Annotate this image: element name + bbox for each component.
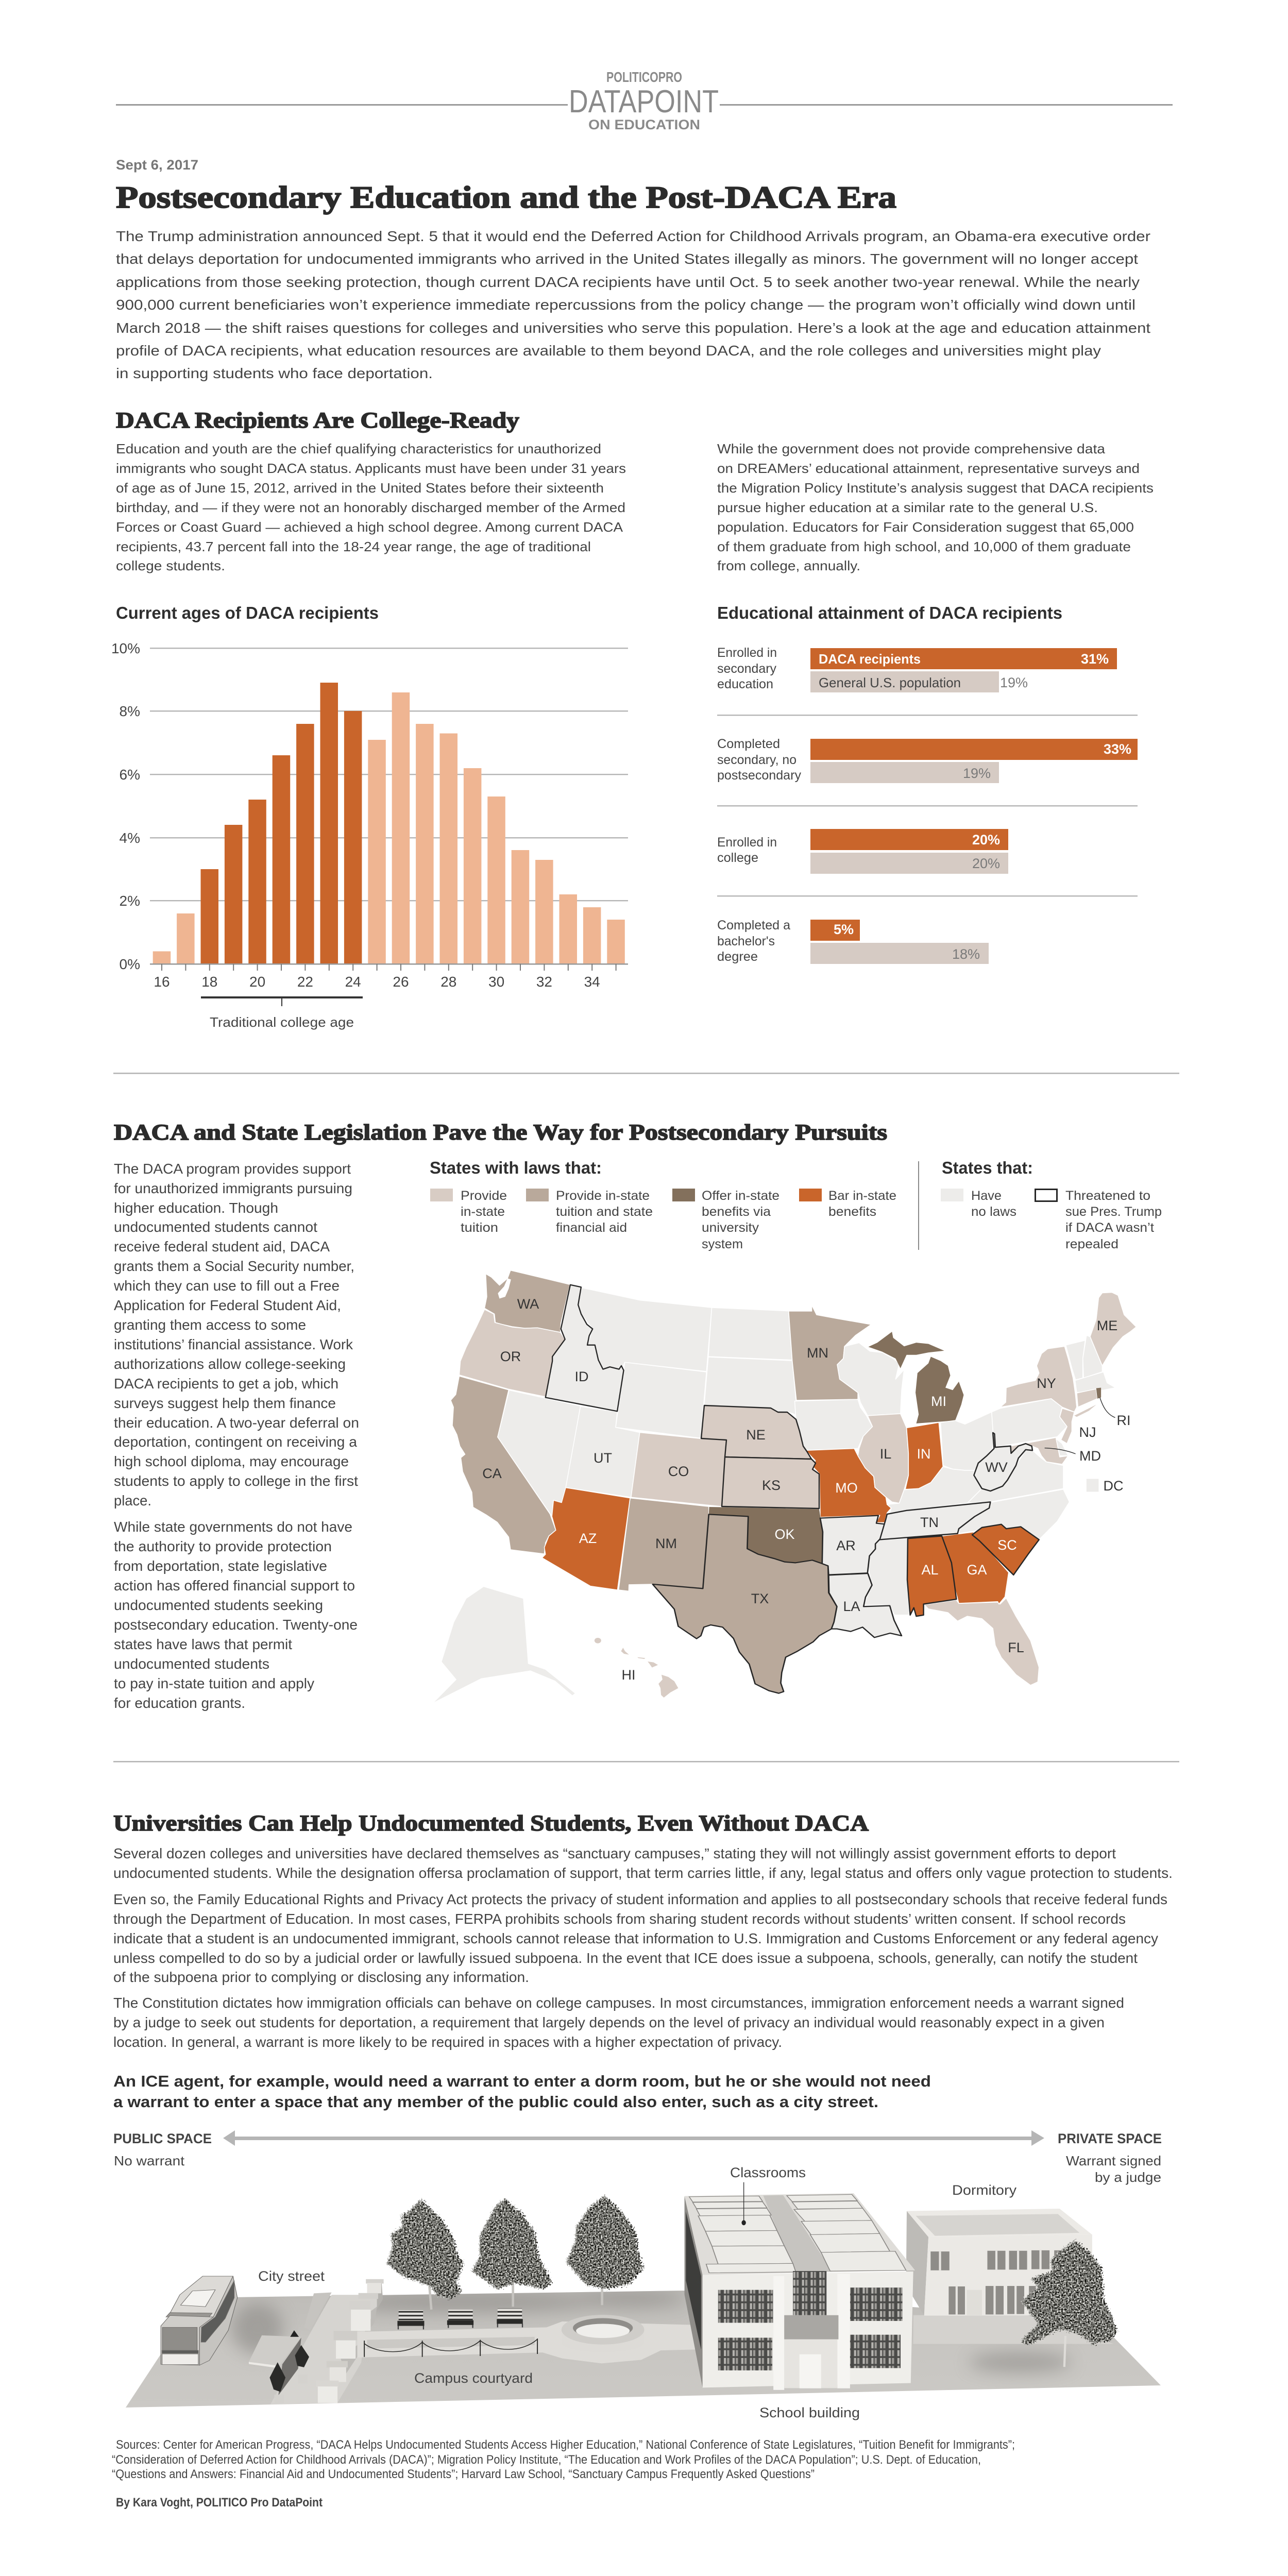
arrow: public to private space (113, 2130, 1162, 2185)
legend: states with laws: in-state (461, 1205, 505, 1219)
bar chart: educational attainment: postsecondary (717, 768, 801, 783)
state labels: MN (807, 1345, 828, 1361)
intro paragraph: profile of DACA recipients, what education resources are available to them beyond DACA, and the role colleges and universities might play (116, 343, 1101, 359)
bus (161, 2276, 238, 2365)
right half of the scene (685, 2182, 1114, 2390)
text block: college-ready left (116, 441, 626, 573)
masthead logo: ON EDUCATION (588, 117, 700, 132)
legend: states with laws (430, 1158, 896, 1251)
bar chart: educational attainment: Enrolled in (717, 646, 777, 660)
text block: DACA program support: higher education. Though (114, 1200, 278, 1216)
legend: states that: States that: (942, 1158, 1033, 1177)
bar chart: current ages of DACA recipients: 8% (120, 703, 140, 719)
state labels: UT (594, 1450, 612, 1466)
text block: DACA program support: high school diploma, may encourage (114, 1453, 349, 1469)
text block: sanctuary campuses (113, 1845, 1173, 2050)
bar chart: current ages of DACA recipients (111, 640, 628, 1030)
state labels: MO (835, 1480, 858, 1496)
text block: sanctuary campuses: undocumented students. While the designation offersa proclamation of support, that term carries little, if any, legal status and offers only vague protection to students. (113, 1865, 1173, 1881)
text block: college-ready left: Forces or Coast Guard — achieved a high school degree. Among current DACA (116, 519, 623, 535)
state labels: TX (751, 1591, 769, 1606)
state labels: FL (1008, 1640, 1024, 1655)
bar chart: current ages of DACA recipients: Traditional college age (210, 1014, 354, 1030)
bar chart: educational attainment: bachelor's (717, 934, 775, 948)
text block: DACA program support: undocumented students seeking (114, 1597, 323, 1613)
bar chart: educational attainment: 19% (963, 766, 991, 781)
masthead logo: DATAPOINT (569, 84, 719, 120)
state labels: NM (655, 1536, 677, 1551)
legend: states with laws: States with laws that: (430, 1158, 602, 1177)
state labels: MI (931, 1394, 946, 1409)
state labels: RI (1117, 1413, 1130, 1428)
text block: DACA program support: undocumented students cannot (114, 1219, 317, 1235)
bar chart: educational attainment: secondary, no (717, 753, 796, 767)
legend: states with laws: financial aid (556, 1221, 627, 1235)
bar chart: current ages of DACA recipients: 18 (201, 974, 217, 990)
scene labels: City street (258, 2268, 325, 2284)
text block: DACA program support: the authority to provide protection (114, 1538, 332, 1554)
text block: DACA program support: postsecondary education. Twenty-one (114, 1617, 358, 1633)
bar chart: current ages of DACA recipients: 26 (393, 974, 409, 990)
text block: DACA program support: students to apply to college in the first (114, 1473, 358, 1489)
state labels: TN (920, 1515, 939, 1530)
text block: DACA program support: The DACA program provides support (114, 1161, 351, 1177)
masthead logo: POLITICOPRO (606, 69, 682, 85)
state labels: AZ (579, 1531, 597, 1546)
callout: ICE agent: a warrant to enter a space that any member of the public could also enter, such as a city street. (113, 2093, 878, 2111)
left half of the scene (161, 2276, 696, 2404)
gate pillars (316, 2279, 384, 2403)
walkway and fountain plaza (357, 2321, 696, 2363)
bar chart: educational attainment: college (717, 851, 758, 865)
bar chart: educational attainment: secondary (717, 662, 776, 676)
text block: college-ready left: college students. (116, 558, 225, 573)
date: Sept 6, 2017 (116, 157, 198, 173)
fountain (562, 2315, 645, 2352)
rope stanchions (364, 2338, 537, 2357)
forecourt (913, 2315, 1114, 2344)
text block: sanctuary campuses: through the Department of Education. In most cases, FERPA prohibits schools from sharing student records without students’ written consent. If school records (113, 1911, 1126, 1927)
state labels: CO (668, 1464, 689, 1479)
bar chart: current ages of DACA recipients: 0% (120, 956, 140, 972)
trunks (429, 2277, 602, 2310)
text block: college-ready right: population. Educators for Fair Consideration suggest that 65,000 (717, 519, 1134, 535)
scene labels: Campus courtyard (414, 2370, 533, 2386)
western states (451, 1270, 798, 1591)
scene labels (258, 2165, 1017, 2420)
text block: sanctuary campuses: location. In general, a warrant is more likely to be required in spaces with a higher expectation of privacy. (113, 2034, 782, 2050)
chart title: educational attainment: Educational attainment of DACA recipients (717, 603, 1062, 622)
text block: DACA program support: action has offered financial support to (114, 1578, 355, 1594)
state labels: KS (762, 1478, 781, 1493)
state labels: HI (621, 1667, 636, 1683)
text block: college-ready right: from college, annually. (717, 558, 860, 573)
state labels: IL (880, 1446, 891, 1462)
bar chart: current ages of DACA recipients: 16 (154, 974, 170, 990)
legend: states that: Have (971, 1189, 1002, 1203)
bar chart: educational attainment (717, 646, 1138, 964)
state labels: NY (1037, 1376, 1056, 1391)
text block: college-ready right: pursue higher education at a similar rate to the general U.S. (717, 500, 1098, 515)
scene labels: Dormitory (952, 2182, 1017, 2198)
state labels: OR (500, 1349, 521, 1364)
text block: DACA program support: undocumented students (114, 1656, 269, 1672)
text block: college-ready right: the Migration Policy Institute’s analysis suggest that DACA recipients (717, 480, 1154, 496)
bar chart: current ages of DACA recipients: 32 (536, 974, 552, 990)
ground (126, 2291, 1161, 2408)
state labels: DC (1104, 1478, 1123, 1494)
callout: ICE agent (113, 2072, 931, 2111)
legend: states that (941, 1158, 1162, 1251)
dormitory tree (1020, 2241, 1117, 2345)
text block: DACA program support: to pay in-state tuition and apply (114, 1675, 314, 1691)
bar chart: educational attainment: 31% (1081, 651, 1109, 667)
state labels: LA (843, 1599, 860, 1614)
text block: college-ready left: recipients, 43.7 percent fall into the 18-24 year range, the age of traditional (116, 539, 591, 554)
text block: college-ready right: While the government does not provide comprehensive data (717, 441, 1106, 456)
state labels: AL (921, 1562, 939, 1578)
legend: states with laws: Provide in-state (556, 1189, 650, 1203)
chart title: current ages: Current ages of DACA recipients (116, 603, 379, 622)
state labels: AR (836, 1538, 856, 1553)
bar chart: educational attainment: Completed (717, 737, 780, 751)
intro paragraph (116, 228, 1150, 381)
Oklahoma (709, 1507, 823, 1564)
bar chart: current ages of DACA recipients: 6% (120, 767, 140, 783)
bar chart: educational attainment: General U.S. population (819, 675, 961, 690)
intro paragraph: 900,000 current beneficiaries won’t experience immediate repercussions from the policy change — the program won’t officially wind down until (116, 297, 1136, 313)
intro paragraph: in supporting students who face deportation. (116, 365, 433, 381)
text block: DACA program support: grants them a Social Security number, (114, 1258, 354, 1274)
text block: DACA program support: surveys suggest help them finance (114, 1395, 336, 1411)
text block: DACA program support: authorizations allow college-seeking (114, 1356, 346, 1372)
legend: states with laws: university (702, 1221, 759, 1235)
illustration: campus scene (126, 2182, 1161, 2408)
intro paragraph: that delays deportation for undocumented immigrants who arrived in the United States illegally as minors. The government will no longer accept (116, 251, 1138, 267)
legend: states with laws: tuition (461, 1221, 498, 1235)
Hawaii (595, 1638, 678, 1698)
bar chart: current ages of DACA recipients: 10% (111, 640, 140, 656)
text block: college-ready left: immigrants who sought DACA status. Applicants must have been under 31 years (116, 461, 626, 476)
bar chart: educational attainment: Completed a (717, 918, 790, 933)
sources (112, 2438, 1015, 2481)
sidewalk (270, 2295, 383, 2404)
state labels: OK (774, 1527, 795, 1542)
leader line to classrooms (741, 2182, 746, 2225)
bar chart: current ages of DACA recipients: 22 (297, 974, 313, 990)
text block: DACA program support: While state governments do not have (114, 1519, 352, 1535)
US map (434, 1270, 1137, 1702)
legend: states with laws: Provide (461, 1189, 507, 1203)
legend: states that: if DACA wasn’t (1065, 1221, 1154, 1235)
text block: sanctuary campuses: by a judge to seek out students for deportation, a requirement that largely depends on the level of privacy an individual would reasonably expect in a given (113, 2014, 1105, 2030)
bar chart: educational attainment: 5% (834, 922, 854, 937)
bar chart: educational attainment: degree (717, 950, 758, 964)
scene labels: Classrooms (730, 2165, 806, 2180)
heading: Universities Can Help: Universities Can Help Undocumented Students, Even Without DACA (113, 1811, 869, 1836)
text block: college-ready left: birthday, and — if they were not an honorably discharged member of the Armed (116, 500, 625, 515)
legend: states that: no laws (971, 1205, 1016, 1219)
text block: college-ready left: Education and youth are the chief qualifying characteristics for unauthorized (116, 441, 601, 456)
scene labels: School building (759, 2405, 860, 2420)
state labels: SC (997, 1537, 1017, 1553)
state labels (482, 1296, 1130, 1683)
arrow: public to private space: PUBLIC SPACE (113, 2131, 212, 2146)
text block: DACA program support: for education grants. (114, 1695, 245, 1711)
state labels: CA (482, 1466, 502, 1481)
bus shelter (249, 2330, 309, 2403)
bar chart: current ages of DACA recipients: 30 (488, 974, 504, 990)
state labels: ID (575, 1369, 588, 1384)
legend: states that: sue Pres. Trump (1065, 1205, 1162, 1219)
text block: sanctuary campuses: unless compelled to do so by a judicial order or lawfully issued subpoena. In the event that ICE does issue a subpoena, schools, generally, can notify the student (113, 1950, 1138, 1966)
state labels: GA (967, 1562, 987, 1578)
sources: Sources: Center for American Progress, “DACA Helps Undocumented Students Access Higher Education,” National Conference of State Legislatures, “Tuition Benefit for Immigrants”; (116, 2438, 1015, 2452)
state labels: ME (1097, 1318, 1117, 1333)
sources: “Questions and Answers: Financial Aid and Undocumented Students”; Harvard Law School, “Sanctuary Campus Frequently Asked Questions” (112, 2467, 815, 2481)
bar chart: educational attainment: 20% (972, 832, 1000, 848)
state labels: WA (517, 1296, 539, 1312)
text block: DACA program support: institutions’ financial assistance. Work (114, 1336, 353, 1352)
text block: DACA program support: Application for Federal Student Aid, (114, 1297, 341, 1313)
text block: college-ready right (717, 441, 1154, 573)
courtyard trees (387, 2196, 643, 2299)
byline: By Kara Voght, POLITICO Pro DataPoint (116, 2496, 323, 2510)
text block: DACA program support: for unauthorized immigrants pursuing (114, 1180, 352, 1196)
bar chart: educational attainment: 18% (952, 946, 980, 962)
arrow: public to private space: Warrant signed (1066, 2153, 1161, 2168)
text block: sanctuary campuses: Several dozen colleges and universities have declared themselves as “sanctuary campuses,” stating they will not willingly assist government efforts to deport (113, 1845, 1116, 1861)
legend: states with laws: system (702, 1237, 743, 1251)
text block: DACA program support: which they can use to fill out a Free (113, 1278, 340, 1294)
state labels: NE (746, 1427, 766, 1443)
state labels: WV (985, 1460, 1008, 1475)
text block: DACA program support: granting them access to some (114, 1317, 306, 1333)
bar chart: current ages of DACA recipients: 2% (120, 893, 140, 909)
legend: states with laws: benefits via (702, 1205, 771, 1219)
text block: DACA program support: from deportation, state legislative (114, 1558, 327, 1574)
text block: sanctuary campuses: indicate that a student is an undocumented immigrant, schools cannot release that information to U.S. Immigration and Customs Enforcement or any federal agency (113, 1930, 1158, 1946)
bar chart: educational attainment: 20% (972, 856, 1000, 871)
central and eastern states (789, 1292, 1137, 1685)
states threatening to sue: south central (653, 1514, 902, 1693)
text block: sanctuary campuses: The Constitution dictates how immigration officials can behave on college campuses. In most circumstances, immigration enforcement needs a warrant signed (113, 1995, 1124, 2011)
sources: “Consideration of Deferred Action for Childhood Arrivals (DACA)”; Migration Policy Institute, “The Education and Work Profiles of the DACA Population”; U.S. Dept. of Education, (112, 2453, 981, 2467)
bar chart: current ages of DACA recipients: 34 (584, 974, 600, 990)
text block: DACA program support: DACA recipients to get a job, which (114, 1376, 338, 1392)
states threatening to sue: Nebraska and Kansas (701, 1405, 819, 1509)
benches (397, 2309, 523, 2329)
bar chart: educational attainment: 33% (1104, 741, 1131, 757)
text block: sanctuary campuses: Even so, the Family Educational Rights and Privacy Act protects the privacy of student information and applies to all postsecondary schools that receive federal funds (113, 1891, 1167, 1907)
text block: college-ready right: on DREAMers’ educational attainment, representative surveys and (717, 461, 1140, 476)
callout: ICE agent: An ICE agent, for example, would need a warrant to enter a dorm room, but he or she would not need (113, 2072, 931, 2090)
text block: DACA program support: their education. A two-year deferral on (114, 1415, 359, 1431)
school building (685, 2193, 915, 2390)
state labels: IN (917, 1446, 930, 1462)
text block: DACA program support: states have laws that permit (114, 1636, 292, 1652)
legend: states with laws: tuition and state (556, 1205, 653, 1219)
text block: DACA program support: receive federal student aid, DACA (114, 1239, 330, 1255)
states threatening to sue: southeast (880, 1397, 1115, 1616)
bar chart: educational attainment: Enrolled in (717, 835, 777, 850)
intro paragraph: applications from those seeking protection, though current DACA recipients have until Oct. 5 to seek another two-year renewal. While the nearly (116, 274, 1140, 290)
bar chart: current ages of DACA recipients: 20 (249, 974, 265, 990)
legend: states with laws: Offer in-state (702, 1189, 779, 1203)
bar chart: educational attainment: DACA recipients (819, 651, 921, 667)
bar chart: current ages of DACA recipients: 4% (120, 830, 140, 846)
heading: DACA Recipients Are College-Ready: DACA Recipients Are College-Ready (116, 409, 520, 433)
heading: DACA and State Legislation: DACA and State Legislation Pave the Way for Postsecondary Pursuits (114, 1121, 887, 1145)
title: Postsecondary Education and the Post-DACA Era (116, 180, 896, 214)
Alaska (434, 1587, 575, 1702)
text block: sanctuary campuses: of the subpoena prior to complying or disclosing any information. (113, 1969, 529, 1985)
arrow: public to private space: PRIVATE SPACE (1058, 2131, 1162, 2146)
text block: DACA program support: deportation, contingent on receiving a (114, 1434, 357, 1450)
masthead logo (116, 69, 1173, 132)
intro paragraph: March 2018 — the shift raises questions for colleges and universities who serve this population. Here’s a look at the age and education attainment (116, 320, 1150, 336)
legend: states that: Threatened to (1065, 1189, 1150, 1203)
intro paragraph: The Trump administration announced Sept. 5 that it would end the Deferred Action for Childhood Arrivals program, an Obama-era executive order (116, 228, 1150, 244)
bar chart: educational attainment: 19% (1000, 675, 1028, 690)
arrow: public to private space: by a judge (1095, 2170, 1161, 2185)
text block: college-ready right: of them graduate from high school, and 10,000 of them graduate (717, 539, 1131, 554)
bar chart: educational attainment: education (717, 677, 773, 691)
text block: DACA program support (113, 1161, 359, 1711)
states threatening to sue: Idaho (546, 1285, 624, 1411)
legend: states with laws: benefits (828, 1205, 876, 1219)
legend: states with laws: Bar in-state (828, 1189, 896, 1203)
text block: DACA program support: place. (114, 1493, 151, 1509)
state labels: MD (1079, 1448, 1101, 1464)
arrow: public to private space: No warrant (114, 2153, 185, 2168)
text block: college-ready left: of age as of June 15, 2012, arrived in the United States before their sixteenth (116, 480, 604, 496)
state labels: NJ (1079, 1425, 1096, 1440)
bar chart: current ages of DACA recipients: 24 (345, 974, 361, 990)
legend: states that: repealed (1065, 1237, 1118, 1251)
trunk (1064, 2336, 1065, 2367)
bar chart: current ages of DACA recipients: 28 (440, 974, 456, 990)
dormitory (906, 2209, 1092, 2316)
